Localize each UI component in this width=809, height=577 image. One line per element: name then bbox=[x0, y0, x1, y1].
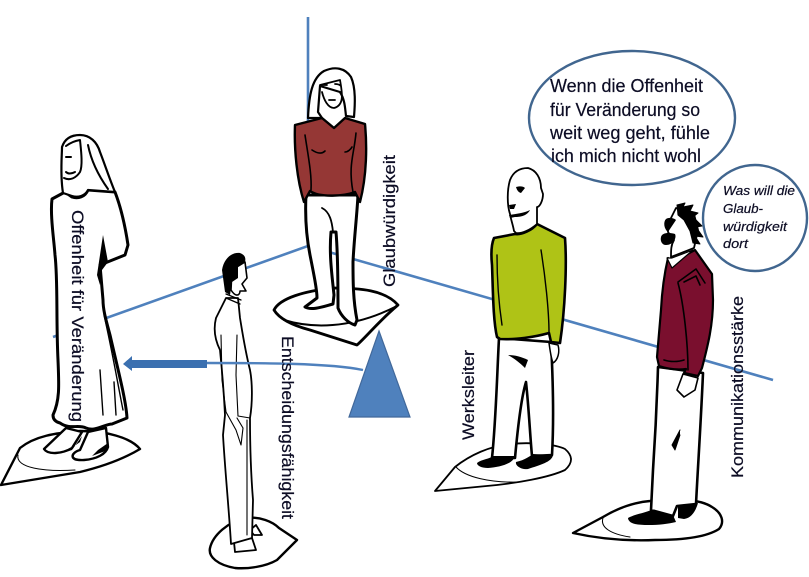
face and beard bbox=[509, 186, 530, 218]
face bbox=[64, 140, 108, 189]
arrow from triangle to Offenheit bbox=[123, 356, 363, 371]
hand and cuff bbox=[677, 374, 698, 397]
axis lines bbox=[53, 17, 773, 380]
trousers bbox=[305, 195, 358, 325]
figure: woman in red sweater, Glaubwürdigkeit bbox=[274, 68, 398, 345]
trousers bbox=[651, 367, 703, 516]
head bbox=[508, 168, 543, 233]
label: Werksleiter: Werksleiter bbox=[459, 350, 478, 440]
dress bbox=[51, 190, 128, 429]
speech bubble: Kommunikationsstärke bbox=[703, 165, 807, 271]
bubble text: Glaub- bbox=[723, 201, 764, 216]
hair bbox=[677, 203, 703, 244]
sweater bbox=[657, 250, 713, 376]
collar bbox=[226, 294, 241, 304]
speech bubble: Werksleiter bbox=[529, 51, 735, 185]
arrow shaft and head bbox=[123, 356, 207, 371]
bubble text: weit weg geht, fühle bbox=[549, 123, 710, 143]
figure: man, Entscheidungsfähigkeit bbox=[210, 253, 297, 568]
sleeve lines bbox=[497, 250, 549, 333]
dress shadow bbox=[97, 235, 108, 285]
head and hair bbox=[61, 135, 115, 197]
moustache and nose bbox=[661, 218, 676, 245]
dress folds bbox=[100, 315, 123, 415]
figure: Werksleiter in green sweater bbox=[435, 168, 571, 491]
label: Entscheidungsfähigkeit: Entscheidungsfähigkeit bbox=[278, 336, 297, 519]
trousers bbox=[492, 338, 553, 458]
standing base bbox=[274, 288, 398, 345]
shoes bbox=[234, 525, 262, 552]
hair bbox=[222, 253, 245, 295]
arm and pocket lines bbox=[221, 335, 250, 535]
bubble text: Wenn die Offenheit bbox=[550, 76, 703, 96]
sweater bbox=[491, 224, 566, 343]
arrow stem bbox=[207, 363, 363, 370]
triangle marker bbox=[349, 331, 410, 417]
standing base bbox=[573, 499, 722, 540]
head bbox=[668, 208, 698, 257]
bubble text: würdigkeit bbox=[723, 219, 789, 234]
bubble outline bbox=[529, 51, 735, 185]
shoes bbox=[628, 503, 698, 525]
face bbox=[320, 80, 342, 108]
inner base ellipse bbox=[18, 455, 75, 470]
sleeve lines bbox=[664, 269, 705, 370]
face bbox=[231, 262, 247, 295]
bubble text: dort bbox=[723, 236, 750, 251]
inner base bbox=[456, 467, 520, 482]
shoes bbox=[477, 454, 553, 469]
body bbox=[215, 298, 253, 544]
collar bbox=[667, 250, 693, 268]
standing base bbox=[435, 443, 571, 491]
standing base bbox=[210, 518, 297, 568]
crotch line bbox=[322, 208, 333, 232]
label: Glaubwürdigkeit: Glaubwürdigkeit bbox=[380, 155, 399, 287]
bubble outline bbox=[703, 165, 807, 271]
hair bbox=[308, 68, 355, 118]
figure: woman in dress, Offenheit für Veränderung bbox=[1, 135, 140, 485]
standing base bbox=[1, 431, 140, 485]
bubble text: ich mich nicht wohl bbox=[551, 146, 701, 166]
bubble text: für Veränderung so bbox=[550, 100, 700, 120]
label: Kommunikationsstärke: Kommunikationsstärke bbox=[728, 296, 747, 478]
figure: man in dark red sweater, looking up bbox=[573, 203, 722, 540]
bubble text: Was will die bbox=[723, 183, 795, 198]
trouser crease bbox=[672, 430, 680, 450]
inner base edge bbox=[284, 306, 397, 325]
shoes bbox=[44, 428, 108, 460]
label: Offenheit für Veränderung: Offenheit für Veränderung bbox=[68, 210, 87, 422]
inner base bbox=[602, 518, 630, 537]
sweater bbox=[295, 118, 366, 202]
crotch shadow bbox=[508, 355, 528, 368]
sleeve lines bbox=[305, 133, 356, 192]
hand bbox=[549, 343, 559, 363]
shoe shadows bbox=[66, 436, 108, 456]
